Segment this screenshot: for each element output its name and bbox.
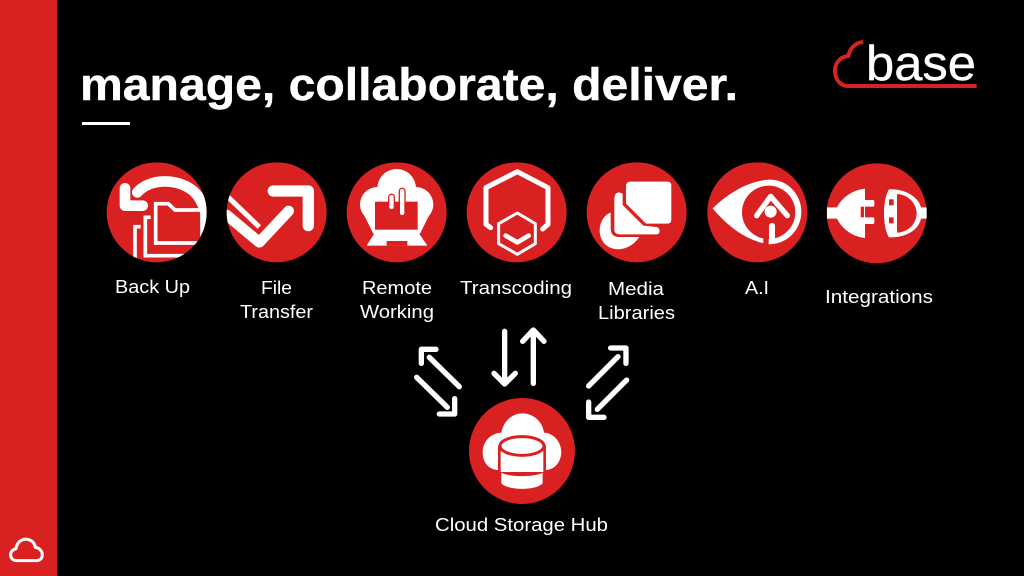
label: file transfer: File — [261, 278, 292, 298]
title underline — [82, 122, 130, 125]
icon circle: cloud storage hub — [469, 398, 575, 504]
label: transcoding: Transcoding — [460, 278, 572, 298]
label: integrations: Integrations — [825, 287, 933, 307]
arrow pair: centre — [494, 330, 544, 384]
logo: base — [835, 37, 977, 91]
label: back up: Back Up — [115, 277, 190, 297]
label: remote working: Working — [360, 302, 434, 322]
label: media libraries: Libraries — [598, 303, 675, 323]
label: media libraries: Media — [608, 279, 665, 299]
label: remote working — [360, 278, 434, 322]
logo wordmark: base — [866, 37, 976, 91]
label: media libraries — [598, 279, 675, 323]
title: manage, collaborate, deliver. — [80, 59, 738, 110]
label: file transfer: Transfer — [240, 302, 313, 322]
icon circle: file transfer — [227, 162, 327, 262]
icon circle: integrations — [827, 163, 927, 263]
label: a.i: A.I — [745, 278, 769, 298]
arrows to hub — [417, 330, 627, 417]
icon circle: a.i — [707, 162, 807, 262]
arrow pair: left — [417, 349, 459, 414]
arrow pair: right — [589, 348, 627, 417]
icon: sidebar cloud — [11, 539, 42, 561]
icon circle: media libraries — [587, 162, 687, 262]
label: remote working: Remote — [362, 278, 432, 298]
icon circle: back up — [107, 162, 208, 262]
label: cloud storage hub: Cloud Storage Hub — [435, 515, 608, 535]
icon circle: transcoding — [467, 162, 567, 262]
logo cloud line — [835, 42, 977, 86]
icon circle: remote working — [347, 162, 447, 262]
red sidebar — [0, 0, 57, 576]
label: file transfer — [240, 278, 313, 322]
